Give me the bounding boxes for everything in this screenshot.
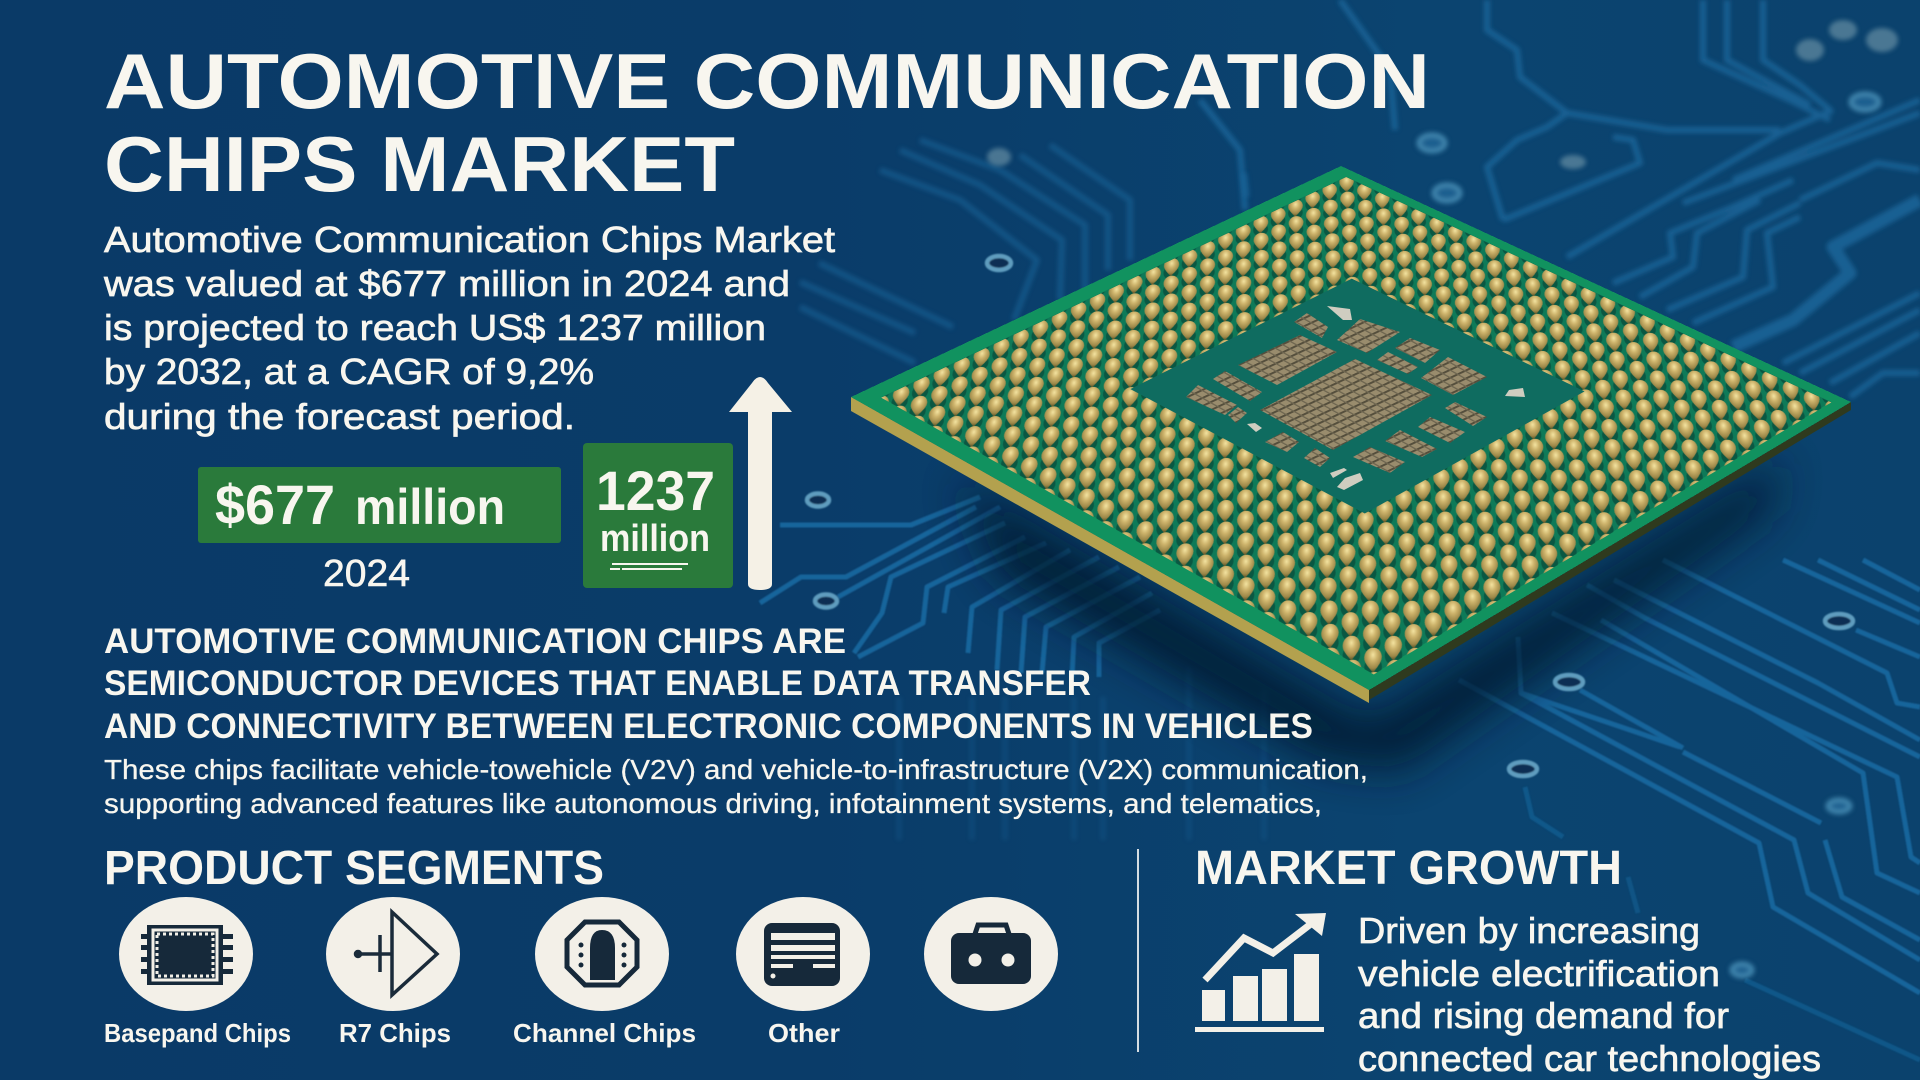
market summary paragraph: during the forecast period. bbox=[104, 396, 575, 437]
upper left traces, faint bbox=[800, 140, 1247, 363]
title: AUTOMOTIVE COMMUNICATION bbox=[104, 37, 1430, 125]
definition body text: supporting advanced features like autonomous driving, infotainment systems, and telematics, bbox=[104, 788, 1322, 819]
definition heading: AND CONNECTIVITY BETWEEN ELECTRONIC COMPONENTS IN VEHICLES bbox=[104, 707, 1313, 746]
lower traces, in focus bbox=[760, 497, 1920, 1060]
segment: r7 chips: R7 Chips bbox=[339, 1018, 451, 1048]
chip illustration bbox=[851, 166, 1851, 703]
definition heading bbox=[104, 622, 1313, 746]
icon: chip bbox=[141, 925, 233, 985]
stat: 2032 value: 1237 bbox=[596, 459, 715, 522]
market summary paragraph: was valued at $677 million in 2024 and bbox=[103, 263, 790, 304]
stat: 2024 value: 2024 bbox=[323, 553, 410, 595]
definition heading: SEMICONDUCTOR DEVICES THAT ENABLE DATA TRANSFER bbox=[104, 664, 1091, 703]
definition body text: These chips facilitate vehicle-towehicle (V2V) and vehicle-to-infrastructure (V2X) communication, bbox=[104, 754, 1368, 785]
market growth text: Driven by increasing bbox=[1358, 910, 1700, 951]
definition body text bbox=[104, 754, 1368, 819]
pin field bbox=[881, 177, 1831, 674]
dim vertical traces behind text bbox=[899, 667, 1264, 840]
icon: briefcase bbox=[951, 925, 1031, 984]
segment: channel chips bbox=[513, 897, 696, 1048]
title: CHIPS MARKET bbox=[104, 120, 735, 208]
market summary paragraph: by 2032, at a CAGR of 9,2% bbox=[104, 351, 594, 392]
via rings bbox=[807, 20, 1898, 976]
heading: product segments: PRODUCT SEGMENTS bbox=[104, 842, 604, 895]
market summary paragraph: is projected to reach US$ 1237 million bbox=[104, 307, 766, 348]
heading: market growth: MARKET GROWTH bbox=[1195, 842, 1622, 895]
market growth text: and rising demand for bbox=[1358, 995, 1729, 1036]
segment: r7 chips bbox=[326, 897, 460, 1048]
icon: octagon chip bbox=[567, 922, 637, 985]
segment: other: Other bbox=[768, 1018, 840, 1048]
chip shadow bbox=[960, 460, 1780, 770]
upper right traces, out of focus bbox=[1200, 0, 1920, 397]
market summary paragraph bbox=[103, 219, 835, 437]
stat: 2032 value: million bbox=[600, 518, 710, 560]
segment: unlabeled case bbox=[924, 897, 1058, 1011]
segment: channel chips: Channel Chips bbox=[513, 1018, 696, 1048]
icon: list device bbox=[764, 923, 840, 986]
stat: 2024 value bbox=[198, 467, 561, 595]
segment: baseband chips: Basepand Chips bbox=[104, 1018, 291, 1048]
growth arrow bbox=[729, 377, 792, 590]
segment: baseband chips bbox=[104, 897, 291, 1048]
segment: other bbox=[736, 897, 870, 1048]
market growth text: vehicle electrification bbox=[1358, 953, 1720, 994]
market growth text bbox=[1358, 910, 1821, 1079]
icon: signal triangle bbox=[356, 912, 437, 995]
stat: 2024 value: $677 bbox=[215, 473, 335, 536]
stat: 2032 value bbox=[583, 443, 733, 588]
chip top surface with pin grid bbox=[852, 166, 1850, 690]
title bbox=[104, 37, 1430, 208]
market growth text: connected car technologies bbox=[1358, 1038, 1821, 1079]
icon: growth chart bbox=[1195, 913, 1326, 1032]
definition heading: AUTOMOTIVE COMMUNICATION CHIPS ARE bbox=[104, 622, 846, 661]
market summary paragraph: Automotive Communication Chips Market bbox=[104, 219, 835, 260]
inner window bbox=[1130, 279, 1585, 513]
stat: 2024 value: million bbox=[355, 479, 505, 535]
